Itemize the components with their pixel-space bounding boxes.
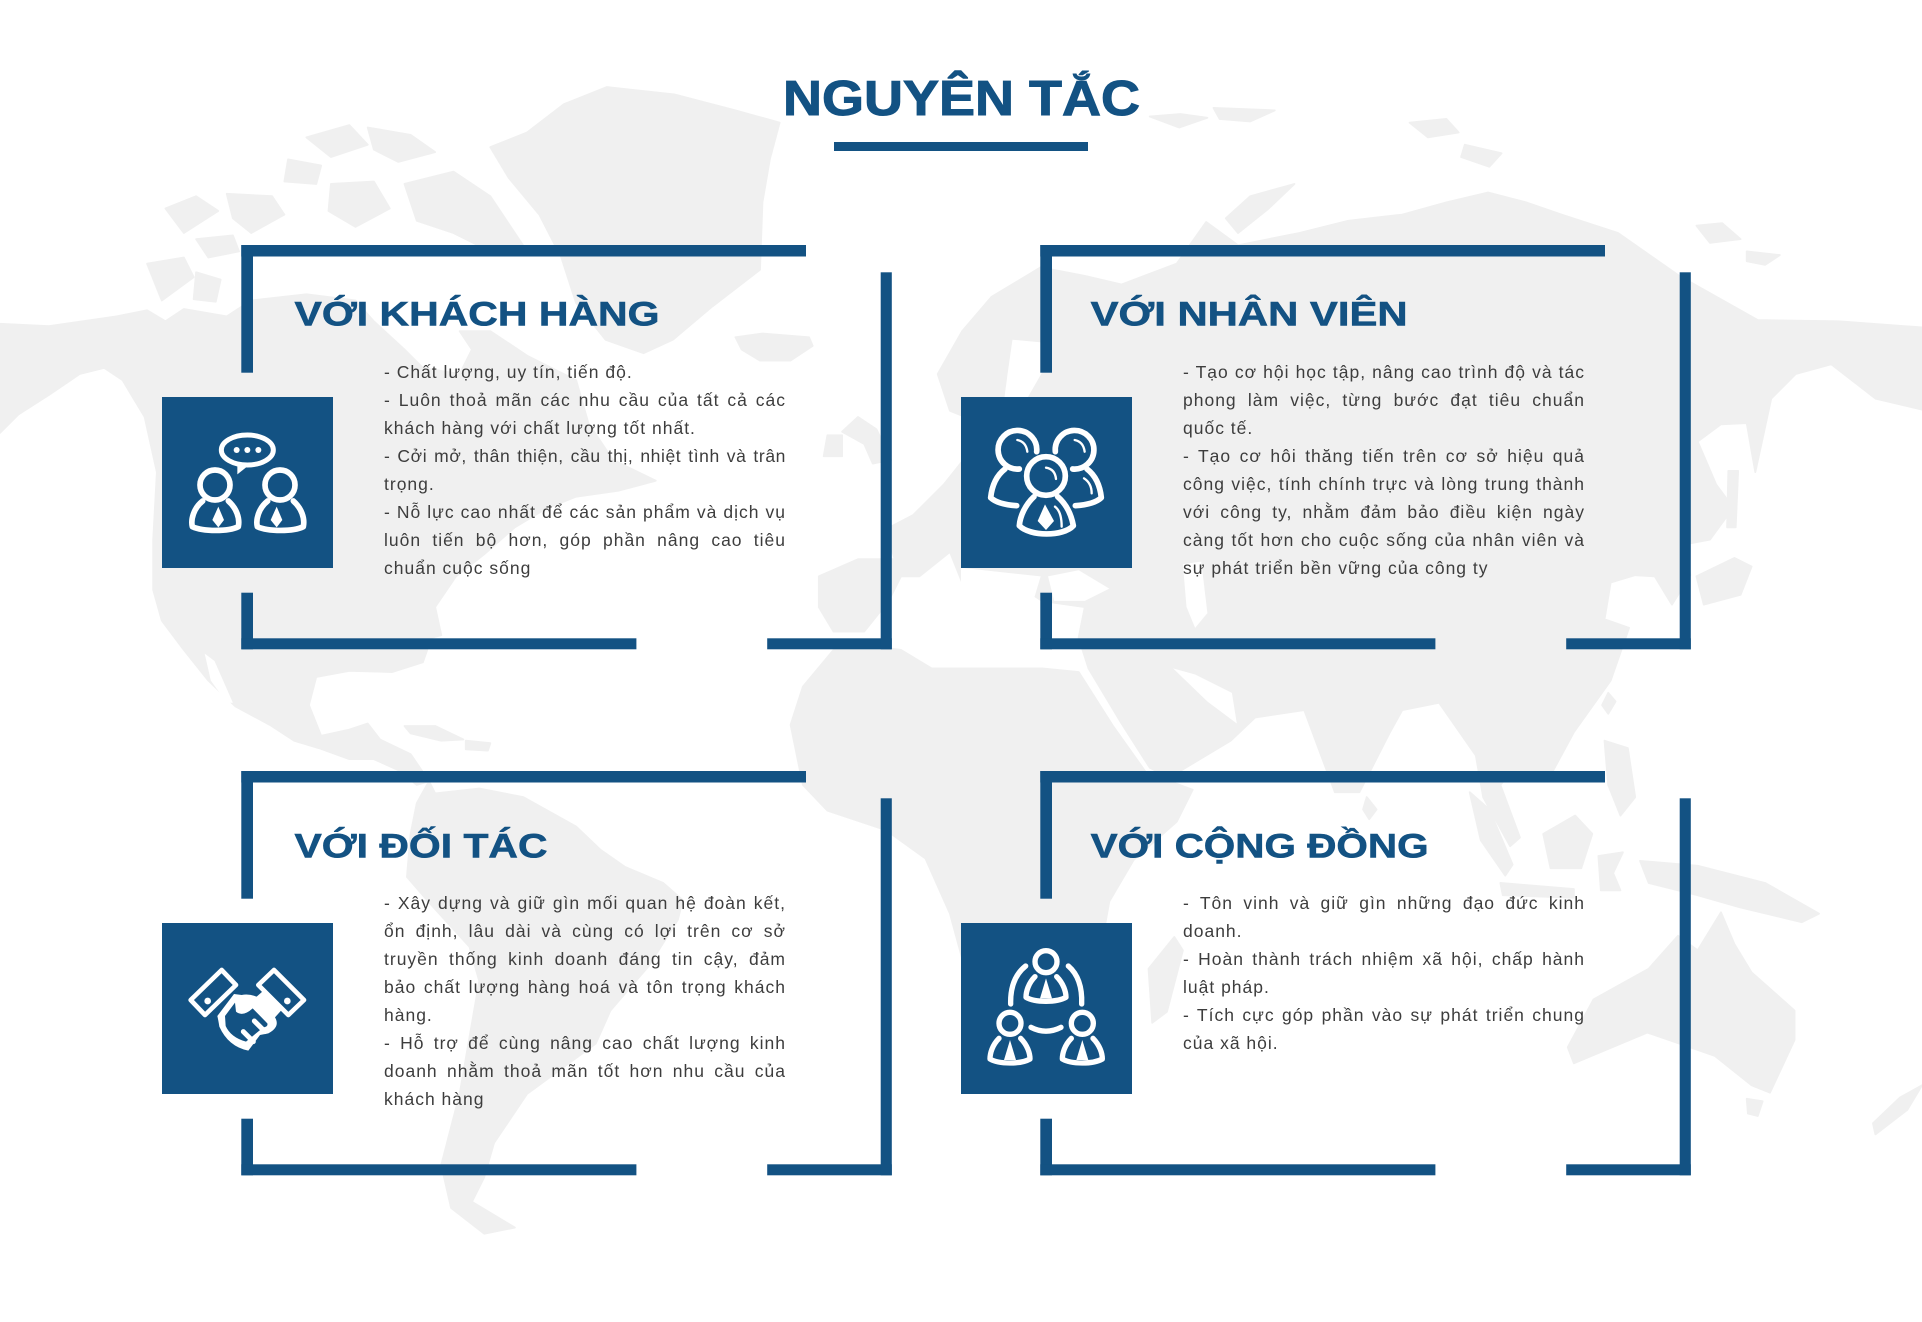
text block: - Tôn vinh và giữ gìn những đạo đức kinh [1183,893,1585,913]
icon: community network [961,923,1132,1094]
text block: - Cởi mở, thân thiện, cầu thị, nhiệt tình và trân [384,446,786,466]
panel: với đối tác [162,771,892,1176]
heading: VỚI CỘNG ĐỒNG [1091,827,1429,866]
text block: - Nỗ lực cao nhất để các sản phẩm và dịch vụ [384,502,786,522]
title: NGUYÊN TẮC [783,70,1140,126]
text block: trọng. [384,474,435,494]
text block: sự phát triển bền vững của công ty [1183,558,1489,578]
text block: doanh. [1183,921,1243,941]
panel frame [1040,771,1691,1176]
text block: - Tạo cơ hôi thăng tiến trên cơ sở hiệu quả [1183,446,1585,466]
icon: handshake [162,923,333,1094]
text block: luật pháp. [1183,977,1270,997]
text block [384,362,786,578]
icon: group of staff [961,397,1132,568]
text block [1183,362,1585,578]
title underline [834,142,1088,151]
text block: - Xây dựng và giữ gìn mối quan hệ đoàn kết, [384,893,786,913]
heading: VỚI KHÁCH HÀNG [294,296,660,334]
panel: với cộng đồng [961,771,1691,1176]
text block: - Luôn thoả mãn các nhu cầu của tất cả các [384,390,786,410]
text block: ổn định, lâu dài và cùng có lợi trên cơ sở [384,921,786,941]
text block: phong làm việc, từng bước đạt tiêu chuẩn [1183,390,1585,410]
text block: - Tích cực góp phần vào sự phát triển chung [1183,1005,1585,1025]
text block: - Hoàn thành trách nhiệm xã hội, chấp hành [1183,949,1585,969]
text block: càng tốt hơn cho cuộc sống của nhân viên và [1183,530,1585,550]
text block: - Chất lượng, uy tín, tiến độ. [384,362,633,382]
text block [1183,893,1585,1053]
text block: hàng. [384,1005,433,1025]
text block: khách hàng với chất lượng tốt nhất. [384,418,696,438]
text block: luôn tiến bộ hơn, góp phần nâng cao tiêu [384,530,786,550]
text block: truyền thống kinh doanh đáng tin cậy, đảm [384,949,786,969]
icon: two people talking [162,397,333,568]
text block: quốc tế. [1183,418,1253,438]
text block: với công ty, nhằm đảm bảo điều kiện ngày [1183,502,1585,522]
text block: chuẩn cuộc sống [384,558,531,578]
text block: - Hỗ trợ để cùng nâng cao chất lượng kinh [384,1033,786,1053]
heading: VỚI ĐỐI TÁC [294,827,548,866]
panel frame [241,245,892,650]
text block [384,893,786,1109]
panel: với khách hàng [162,245,892,650]
text block: - Tạo cơ hội học tập, nâng cao trình độ và tác [1183,362,1585,382]
text block: của xã hội. [1183,1033,1279,1053]
heading: VỚI NHÂN VIÊN [1091,296,1408,334]
text block: bảo chất lượng hàng hoá và tôn trọng khách [384,977,786,997]
panel frame [241,771,892,1176]
text block: công việc, tính chính trực và lòng trung thành [1183,474,1585,494]
text block: doanh nhằm thoả mãn tốt hơn nhu cầu của [384,1061,786,1081]
panel: với nhân viên [961,245,1691,650]
panel frame [1040,245,1691,650]
text block: khách hàng [384,1089,484,1109]
